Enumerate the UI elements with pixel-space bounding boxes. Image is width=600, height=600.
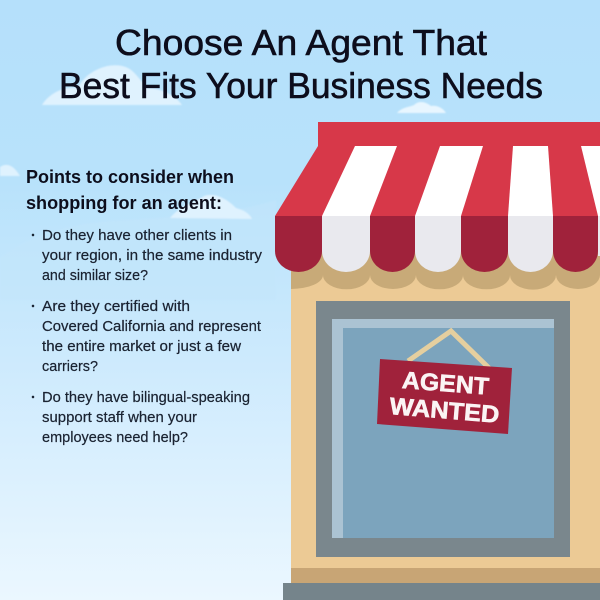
sill: [291, 568, 600, 583]
bullet 1: [32, 228, 263, 284]
sign text: WANTED: [389, 393, 500, 429]
awning top band: [275, 122, 600, 216]
sign text: [389, 367, 500, 429]
bullet 1: and similar size?: [42, 268, 148, 284]
bullet 2: carriers?: [42, 359, 98, 375]
building wall: [291, 250, 600, 568]
bullet 3: employees need help?: [42, 430, 188, 446]
sign text: AGENT: [401, 367, 490, 401]
window frame: [316, 301, 570, 557]
bullet 2: [32, 299, 261, 375]
window glass highlight: [332, 319, 554, 538]
title: Best Fits Your Business Needs: [59, 65, 543, 106]
cloud at left edge: [0, 165, 20, 176]
clouds: [0, 65, 446, 300]
title: [59, 22, 543, 106]
subheading: shopping for an agent:: [26, 193, 222, 213]
storefront: [275, 122, 600, 600]
hanging sign: [377, 331, 512, 434]
sign string: [408, 331, 489, 368]
sign board: [377, 359, 512, 434]
bullet 1: Do they have other clients in: [42, 228, 232, 244]
bullet 2: Covered California and represent: [42, 319, 261, 335]
cloud behind title: [42, 65, 182, 105]
title: Choose An Agent That: [115, 22, 487, 63]
base step: [283, 583, 600, 600]
awning: [275, 122, 600, 272]
bullet list: [32, 228, 263, 446]
faint wide cloud band: [0, 200, 276, 300]
bullet 2: Are they certified with: [42, 299, 190, 315]
bullet 1: your region, in the same industry: [42, 248, 263, 264]
valance scallops: [275, 216, 322, 272]
window glass: [343, 328, 554, 538]
bullet 3: support staff when your: [42, 410, 197, 426]
bullet 3: [32, 390, 250, 446]
small cloud below title: [397, 102, 446, 113]
subheading: Points to consider when: [26, 167, 234, 187]
cloud beside subheading: [170, 195, 252, 219]
bullet 3: Do they have bilingual-speaking: [42, 390, 250, 406]
white stripes: [322, 146, 397, 216]
bullet 2: the entire market or just a few: [42, 339, 242, 355]
awning shadow: [291, 250, 600, 290]
subheading: [26, 167, 234, 213]
